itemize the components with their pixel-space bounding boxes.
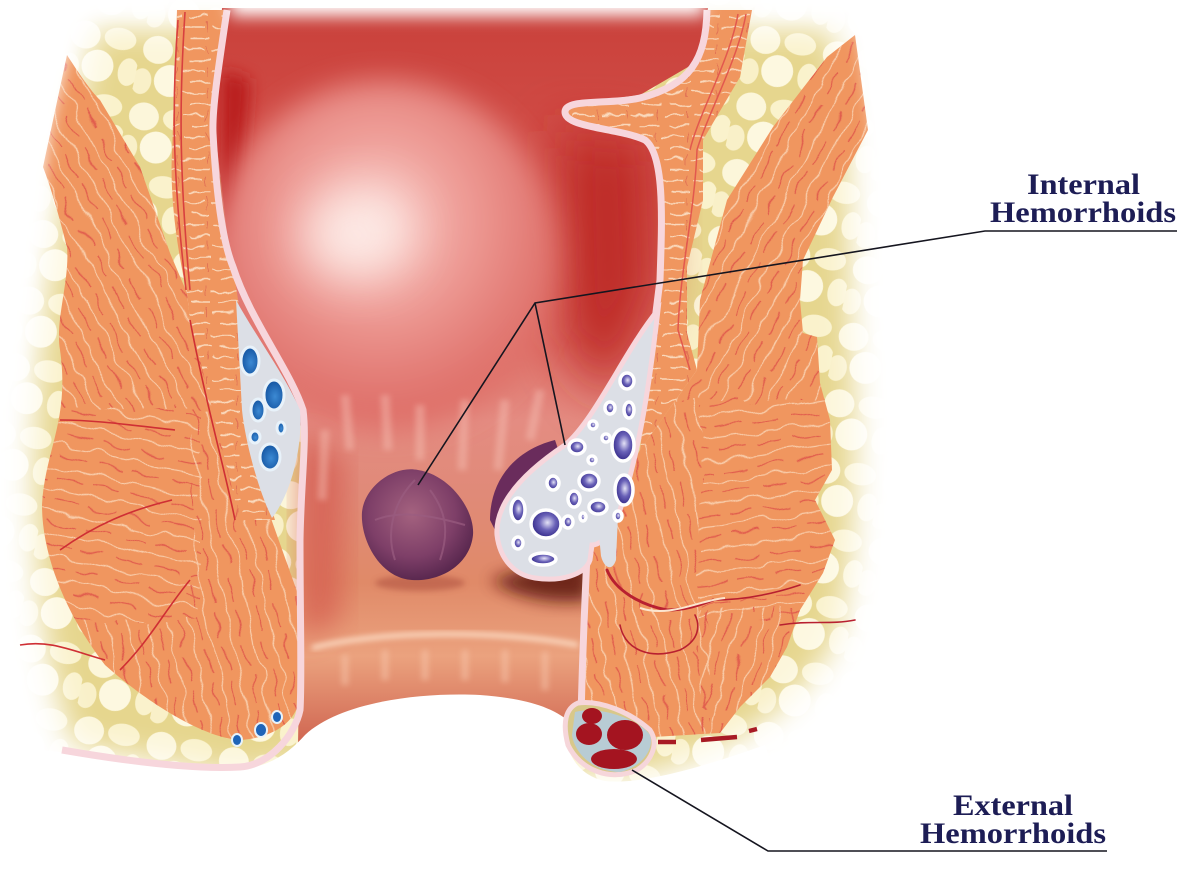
- left muscle fibres: [42, 62, 298, 738]
- left anal muscle: [20, 10, 298, 740]
- label: external hemorrhoids: Hemorrhoids: [920, 817, 1106, 850]
- anal band: [312, 634, 578, 648]
- leader lines: [418, 231, 1177, 851]
- right inner strip: [565, 10, 752, 450]
- left strip longitudinal fibres: [174, 12, 190, 290]
- rectal lumen: [213, 8, 708, 745]
- venous cells: [511, 373, 634, 565]
- right strip longitudinal fibres: [678, 14, 746, 370]
- deep red shading left of dome: [220, 70, 275, 340]
- shadow under left hemorrhoid: [375, 575, 465, 591]
- label: internal hemorrhoids: Hemorrhoids: [990, 196, 1176, 229]
- gray finger below section: [598, 515, 618, 567]
- external hemorrhoid: [565, 703, 757, 775]
- label: external hemorrhoids: External: [953, 789, 1073, 822]
- pale muscle seam: [640, 598, 725, 611]
- dark right shading: [560, 130, 655, 400]
- mucosal folds: [322, 390, 540, 500]
- label: external hemorrhoids: [920, 789, 1106, 850]
- highlight: [300, 190, 410, 280]
- anal band streaks: [345, 650, 545, 690]
- white exterior below the anal opening: [0, 694, 810, 877]
- internal hemorrhoid: cross-section: [490, 310, 658, 579]
- left vein section with blue vessels: [236, 300, 300, 518]
- soft fade at top and sides: [0, 0, 900, 450]
- pale blue vessel walls: [572, 710, 651, 772]
- label: internal hemorrhoids: [990, 168, 1176, 229]
- fatty tissue background: [0, 0, 900, 800]
- left red vessels: [20, 320, 235, 670]
- blood clots: [576, 708, 643, 769]
- internal hemorrhoid: external view: [362, 469, 473, 580]
- left inner strip: [172, 10, 275, 520]
- lower left blue vessels: [232, 711, 282, 746]
- side shade beside hemorrhoids: [300, 430, 345, 640]
- mucosa lining outlines: [62, 10, 707, 768]
- label: internal hemorrhoids: Internal: [1027, 168, 1140, 201]
- vein tail: [658, 729, 757, 742]
- right red vessels: [607, 570, 855, 654]
- shadow under hemorrhoids: [490, 550, 590, 602]
- rectal dome: [213, 80, 557, 430]
- right anal muscle: [555, 0, 880, 740]
- right muscle fibres: [580, 20, 880, 740]
